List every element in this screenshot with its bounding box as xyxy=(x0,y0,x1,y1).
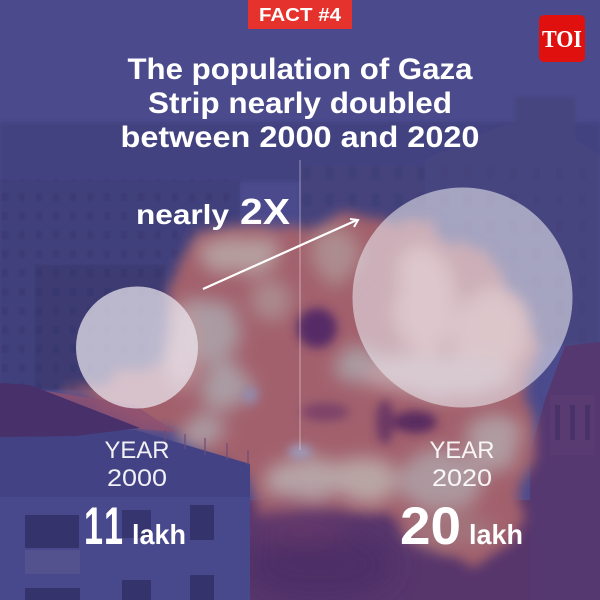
title: The population of Gaza xyxy=(128,53,473,86)
background photo: building lower left xyxy=(0,383,250,600)
title: Strip nearly doubled xyxy=(148,87,452,120)
divider line xyxy=(299,160,301,450)
growth label: nearly xyxy=(136,199,229,230)
TOI logo: TOI xyxy=(542,27,582,53)
circle: year 2020 xyxy=(352,188,572,408)
label: year 2000 xyxy=(104,437,170,492)
value: 11 lakh: 1 xyxy=(104,497,123,556)
FACT badge xyxy=(248,0,352,29)
background photo: building right details xyxy=(550,395,595,455)
value: 11 lakh: lakh xyxy=(132,519,186,550)
title xyxy=(120,53,480,154)
value: 11 lakh xyxy=(84,497,186,556)
value: 20 lakh xyxy=(400,497,523,556)
title: between 2000 and 2020 xyxy=(120,121,480,154)
value: 20 lakh: 20 xyxy=(400,497,461,556)
FACT badge: FACT #4 xyxy=(259,5,341,25)
background photo: dark lower smoke xyxy=(250,342,600,600)
value: 11 lakh: 1 xyxy=(84,497,103,556)
label: year 2020 xyxy=(430,437,494,492)
label: year 2000: 2000 xyxy=(107,465,167,492)
value: 20 lakh: lakh xyxy=(469,519,523,550)
label: year 2020: YEAR xyxy=(430,437,494,464)
circle: year 2000 xyxy=(76,286,198,408)
growth label xyxy=(136,191,290,232)
arrow xyxy=(203,219,358,289)
growth label: 2X xyxy=(240,191,290,232)
background photo: distant city skyline xyxy=(0,97,600,390)
label: year 2020: 2020 xyxy=(432,465,492,492)
background photo: explosion body xyxy=(60,215,538,565)
background photo: smoke base xyxy=(245,513,395,600)
TOI logo xyxy=(539,15,585,62)
background photo: pale cloud lobes xyxy=(166,227,528,548)
background photo: dark smoke patches xyxy=(243,308,437,459)
label: year 2000: YEAR xyxy=(104,437,170,464)
